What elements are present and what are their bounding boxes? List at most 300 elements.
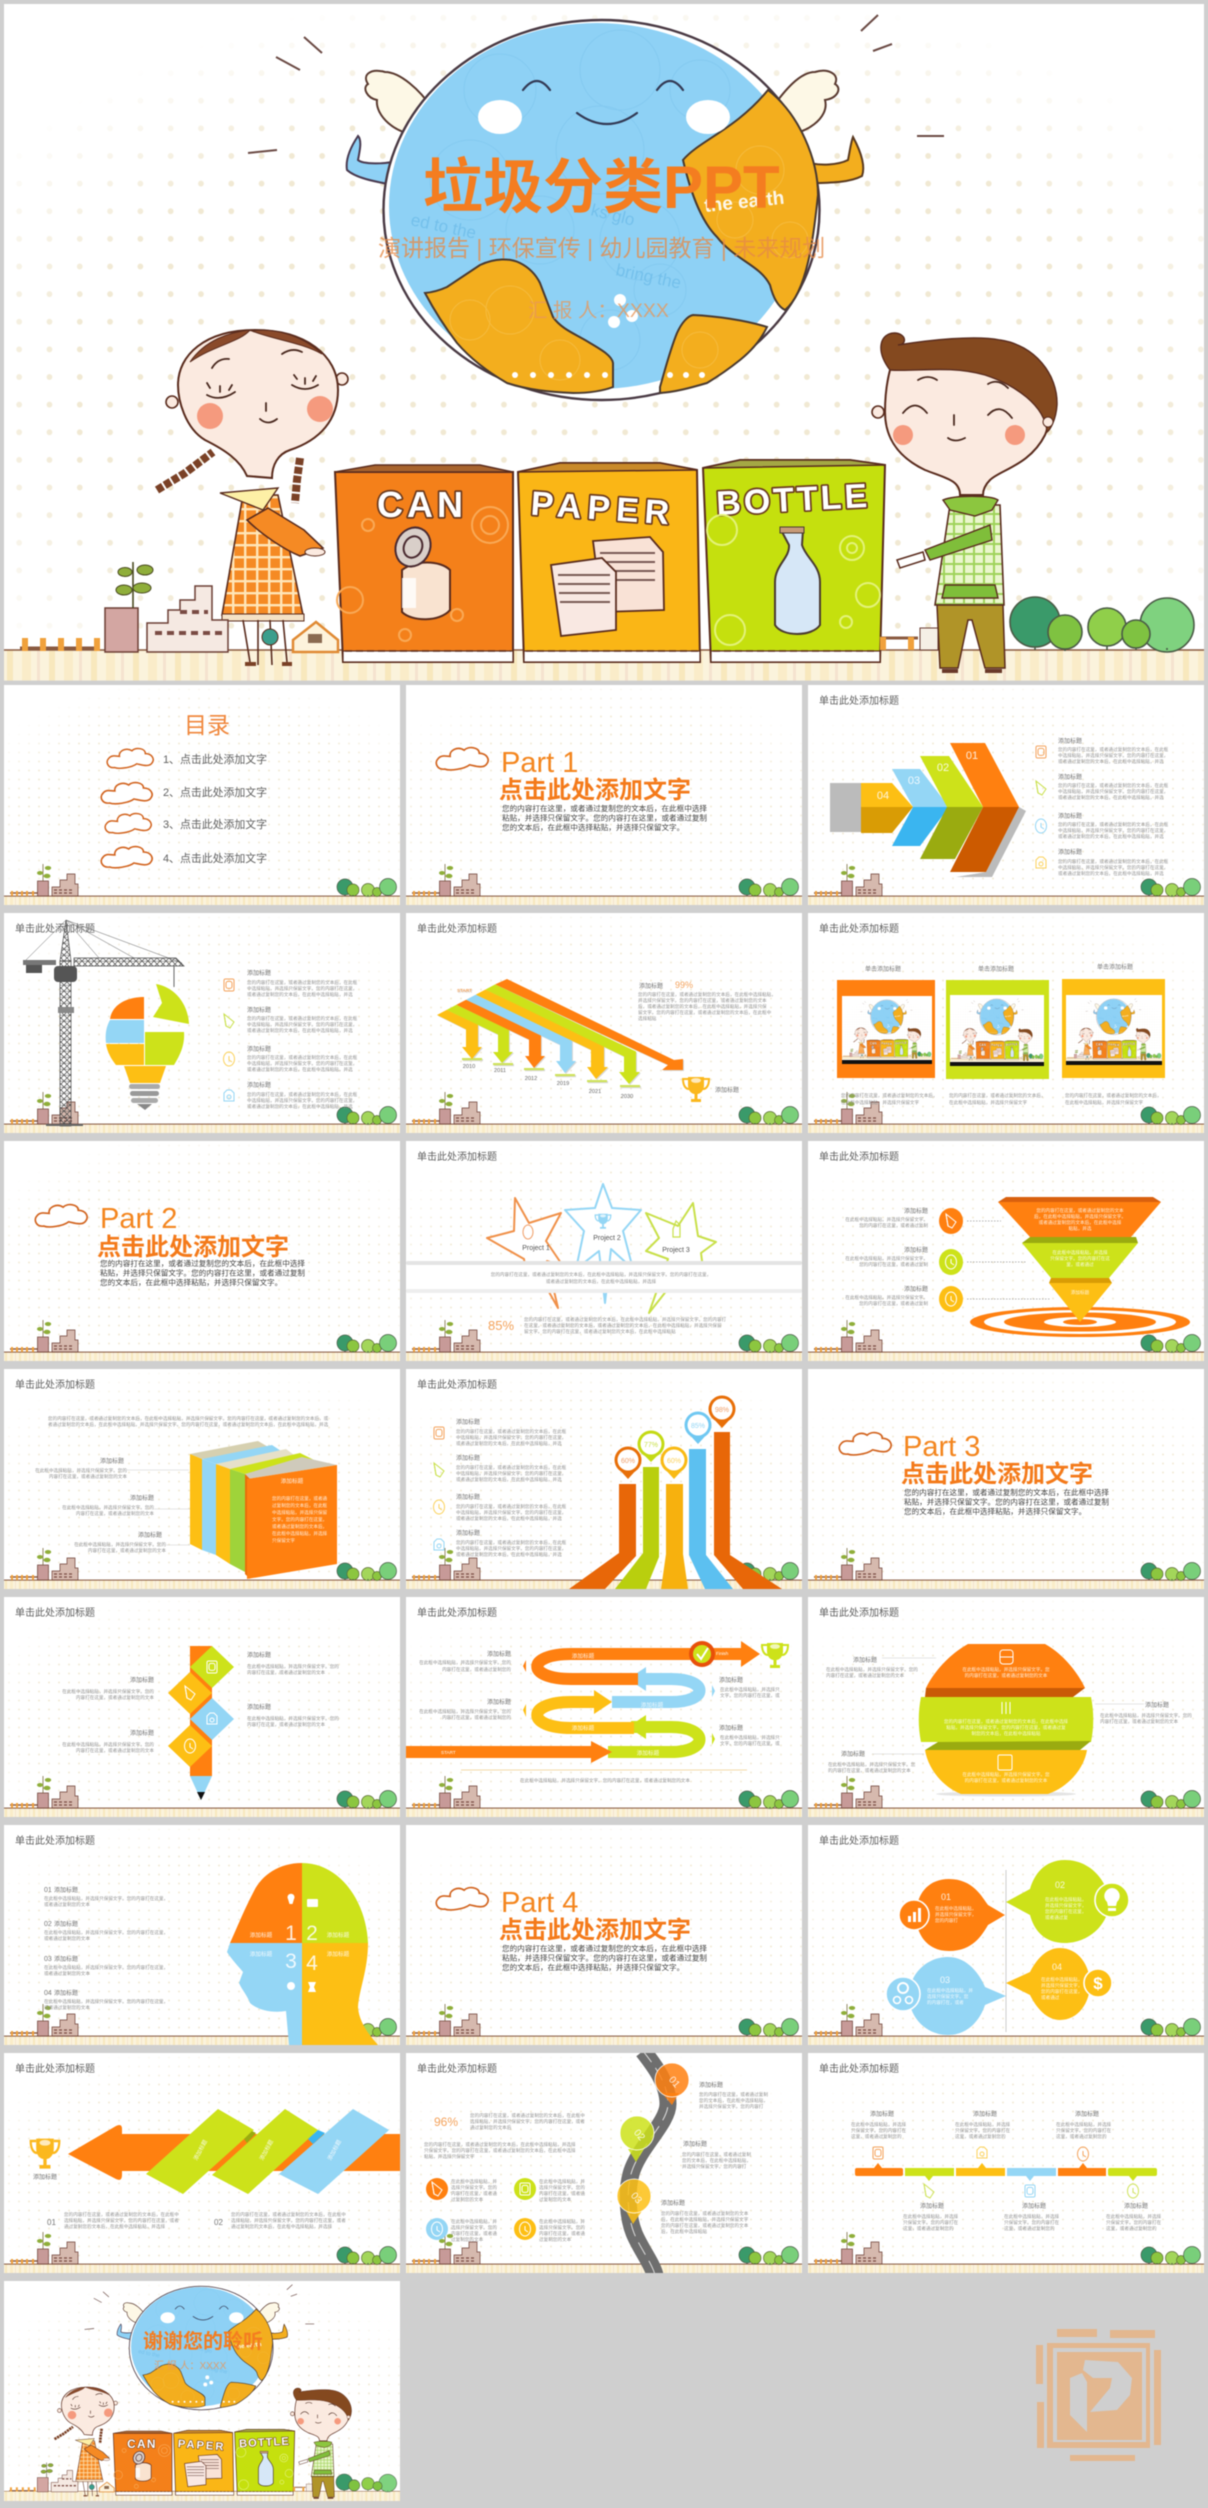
list with icons: 或者通过复制您的文本后，在此框中选择粘贴，并选 [456,1476,562,1483]
lower notes: 这里，或者通过复制您的 [1004,2225,1055,2232]
part 2 body [100,1258,305,1287]
percent pins: 77% [644,1442,658,1449]
slide: arrow with ribbons: 单击此处添加标题 [15,2062,95,2075]
list with icons: 您的内容打在这里，或者通过复制您的文本后，在此框 [456,1428,567,1435]
card: lime [946,980,1049,1079]
book stack: 添加标题 [281,1477,304,1485]
part 4 heading: Part 4 [501,1887,578,1919]
star labels [522,1235,690,1254]
part 3 body: 粘贴，并选择只保留文字。您的内容打在这里，或者通过复制 [904,1496,1109,1506]
pencil labels: 内容打在这里，或者通过复制您的文本 [247,1669,326,1676]
numbered list: 或者通过复制您的文本 [44,1935,90,1942]
pencil labels: 在此框中选择粘贴，并选择只保留文字。您的 [247,1663,339,1670]
star icons [523,1214,680,1239]
slide: crane and bulb: 单击此处添加标题 [15,922,95,935]
side labels: 在此框中选择粘贴，并选择只保留文字。您 [828,1761,916,1768]
timeline bar [855,2163,1157,2181]
layered chart: 制您的文本后，在此框中选择粘贴 [972,1730,1041,1737]
four icon notes: 在此框中选择粘贴，并 [539,2218,585,2225]
list with icons: 或者通过复制您的文本后，在此框中选择粘贴，并选 [1058,794,1164,801]
head silhouette: 添加标题 [250,1931,273,1939]
bubble 01: 并选择只保留文字， [935,1911,976,1918]
road notes: 并选择只保留文字。您的内容打 [699,2103,764,2110]
head silhouette: 1 [285,1922,297,1945]
bubble 01: 您的内容打 [935,1917,958,1924]
step text: 添加标题 [904,1207,928,1215]
side notes: 文字。您的内容打在这里，或 [720,1740,780,1747]
side labels [826,1656,1192,1774]
stat block: 粘贴，并选择只保留文字 [424,2153,475,2160]
trophy [683,1077,739,1102]
list with icons: 添加标题 [456,1529,480,1537]
girl [157,452,213,490]
slide: part 1 [406,685,802,905]
head silhouette: 添加标题 [250,1950,273,1958]
funnel layers: 只保留文字。您的内容打在这 [1050,1255,1110,1262]
funnel layers: 或者通过复制您的文本后，在此框中选择 [1039,1219,1122,1226]
recycling bins [335,465,513,662]
trophy: 添加标题 [33,2173,57,2181]
slide: winding road: 单击此处添加标题 [417,2062,497,2075]
four icon notes: 选择只保留文字。您的 [451,2184,497,2191]
road pins: 01 [666,2075,682,2091]
recycling bins: CAN [377,484,467,525]
slide: books: 单击此处添加标题 [15,1378,95,1391]
list with icons: 或者通过复制您的文本后，在此框中选择粘贴，并选 [247,1066,353,1073]
card labels: 单击添加标题 [865,965,901,973]
list with icons [1036,737,1169,877]
list with icons: 中选择粘贴，并选择只保留文字。您的内容打在这里， [247,1060,357,1067]
slide: winding road [406,2051,802,2275]
upper notes: 这里，或者通过复制您的 [955,2133,1006,2140]
list with icons: 或者通过复制您的文本后，在此框中选择粘贴，并选 [1058,870,1164,877]
thank you title: 谢谢您的聆听 [143,2330,263,2353]
star labels: Project 3 [662,1247,690,1254]
part 3 body: 您的文本后，在此框中选择粘贴，并选择只保留文字。 [904,1506,1086,1516]
hero subtitle: 演讲报告 | 环保宣传 | 幼儿园教育 | 未来规划 [378,235,825,261]
part 4 heading [499,1887,691,1944]
book stack: 中选择粘贴，并选择只保留 [272,1509,328,1516]
head silhouette [227,1863,378,2045]
step text: 添加标题 [904,1285,928,1293]
flow labels: 添加标题 [572,1724,595,1732]
stat block: 通过复制您的文本后 [470,2124,512,2131]
ribbons: 添加标题 [191,2138,209,2162]
stat text: 后，或者通过复制您的文本后，在此框中选择粘贴，并选择只保 [638,1003,767,1010]
hero illustration: BOTTLE [715,477,871,523]
part 2 body: 您的文本后，在此框中选择粘贴，并选择只保留文字。 [100,1277,282,1287]
list with icons: 您的内容打在这里，或者通过复制您的文本后，在此框 [456,1503,567,1510]
side notes: 在此框中选择粘贴，并选择只保留文字。您的 [419,1708,511,1715]
bubble 02: 在此框中选择粘贴， [1045,1896,1086,1903]
road notes [661,2081,768,2235]
list with icons: 或者通过复制您的文本后，在此框中选择粘贴，并选 [1058,758,1164,765]
year labels: 2019 [557,1081,569,1087]
numbered list: 或者通过复制您的文本 [44,2004,90,2011]
road notes: 后，在此框中选择粘贴 [661,2228,707,2235]
four icon notes: 在此框中选择粘贴，并 [451,2178,497,2185]
upper notes: 只保留文字。您的内容打在 [955,2127,1011,2134]
list with icons [434,1418,567,1558]
pencil [168,1646,234,1800]
intro text [48,1415,329,1428]
upper notes: 添加标题 [973,2110,997,2118]
four icon notes: 内容打在这里，或者通 [451,2230,497,2237]
card captions: 在此框中选择粘贴，并选择只保留文字 [841,1099,920,1106]
step text: 您的内容打在这里，或者通过复制 [859,1222,928,1229]
list with icons: 添加标题 [247,1045,271,1053]
percent note: 留文字。您的内容打在这里，或者通过复制您的文本后，在此框中选择粘贴 [524,1328,676,1335]
stat text: 并选择只保留文字。您的内容打在这里，或者通过复制您的文本 [638,997,767,1004]
lower notes: 添加标题 [920,2202,944,2210]
list with icons: 添加标题 [1058,737,1082,745]
slide: funnel: 单击此处添加标题 [819,1150,899,1163]
side notes: 在此框中选择粘贴，并选择只 [720,1734,780,1741]
part 2 body: 您的内容打在这里，或者通过复制您的文本后，在此框中选择 [100,1258,305,1268]
side notes: 内容打在这里，或者通过复制您的 [442,1666,511,1673]
flow labels [441,1651,729,1757]
book stack: 在此框中选择粘贴，并选择 [272,1530,328,1537]
watermark logo [1036,2329,1161,2461]
slide: thank you [4,2281,400,2501]
numbered list: 添加标题 [54,1989,78,1997]
four icon notes: 选择只保留文字。您的 [539,2224,585,2231]
slide: head diagram [4,1825,400,2045]
list with icons: 或者通过复制您的文本后，在此框中选择粘贴，并选 [456,1440,562,1447]
step text: 在此框中选择粘贴，并选择只保留文字。 [845,1294,928,1301]
percent pins: 85% [691,1423,705,1430]
slide: segmented timeline [808,2053,1204,2273]
year labels: 2021 [589,1089,601,1095]
list with icons: 中选择粘贴，并选择只保留文字。您的内容打在这里， [1058,864,1168,871]
road notes: 您的内容打在这里，或者通过复制 [699,2091,768,2098]
slide: percent pillars [406,1369,802,1589]
list with icons: 添加标题 [247,1006,271,1014]
lower notes: 这里，或者通过复制您的 [1106,2225,1157,2232]
head silhouette: 添加标题 [327,1931,350,1939]
four icon notes: 过复制您的文本 [539,2196,572,2203]
side notes: 在此框中选择粘贴，并选择只 [720,1686,780,1693]
list with icons: 您的内容打在这里，或者通过复制您的文本后，在此框 [1058,782,1169,789]
trophy [31,2139,59,2181]
numbered list: 在此框中选择粘贴，并选择只保留文字。您的内容打在这里， [44,1895,168,1902]
side labels: 在此框中选择粘贴，并选择只保留文字。您的 [1100,1712,1192,1719]
list with icons: 您的内容打在这里，或者通过复制您的文本后，在此框 [247,1091,358,1098]
intro text: 您的内容打在这里，或者通过复制您的文本后，在此框中选择粘贴，并选择只保留文字。您的内容打在这里，或者通过复制您的文本后，或 [48,1415,329,1422]
book labels: 内容打在这里，或者通过复制您的文本 [49,1473,127,1480]
part 1 heading [499,747,691,804]
stat text: 您的内容打在这里，或者通过复制您的文本后，在此框中选择粘贴， [638,991,776,998]
side notes: 添加标题 [487,1650,511,1658]
lower notes: 只保留文字。您的内容打在 [903,2219,959,2226]
bubble 04: 并选择只保留文字， [1041,1982,1082,1989]
slide: segmented timeline: 单击此处添加标题 [819,2062,899,2075]
slide: three picture cards [808,913,1204,1133]
part 1 body: 粘贴，并选择只保留文字。您的内容打在这里，或者通过复制 [502,812,707,822]
stat block: 只保留文字。您的内容打在这里，或者通过复制您的文本后，在此框中选择 [424,2147,576,2154]
slide: part 2 [4,1141,400,1361]
list with icons: 或者通过复制您的文本后，在此框中选择粘贴，并选 [456,1551,562,1558]
hero illustration: bring the [614,260,683,293]
slide: funnel [808,1141,1204,1361]
ribbons: 添加标题 [325,2138,343,2162]
side notes [419,1650,780,1747]
list with icons: 您的内容打在这里，或者通过复制您的文本后，在此框 [247,1015,358,1022]
four icon notes: 内容打在这里，或者通 [451,2190,497,2197]
slide: table of contents [4,685,400,905]
year labels: 2011 [494,1068,506,1074]
snake flow [406,1641,760,1763]
book labels: 添加标题 [138,1531,162,1539]
part 4 heading: 点击此处添加文字 [499,1916,691,1944]
slide: books [4,1369,400,1589]
flow labels: 添加标题 [572,1652,595,1660]
pencil labels: 添加标题 [247,1651,271,1659]
list with icons: 中选择粘贴，并选择只保留文字。您的内容打在这里， [456,1545,566,1552]
ribbons: 添加标题 [257,2138,275,2162]
contents list: 1、点击此处添加文字 [163,752,267,766]
book stack: 过复制您的文本后，在此框 [272,1502,328,1509]
bubble 02: 02 [1055,1880,1065,1890]
funnel layers: 添加标题 [1071,1289,1090,1296]
list with icons: 您的内容打在这里，或者通过复制您的文本后，在此框 [1058,858,1169,865]
list with icons: 或者通过复制您的文本后，在此框中选择粘贴，并选 [456,1515,562,1522]
part 4 body [502,1943,707,1972]
card: yellow [1062,979,1165,1078]
side notes: 文字。您的内容打在这里，或 [720,1692,780,1699]
white band: 或者通过复制您的文本后，在此框中选择粘贴，并选择 [546,1278,657,1285]
side labels: 内容打在这里，或者通过复制您的文本 [826,1672,905,1679]
flow labels: Finish [716,1651,729,1656]
bubble 01: 01 [941,1892,951,1902]
part 2 heading: 点击此处添加文字 [97,1233,289,1261]
part 2 heading [97,1203,289,1261]
list with icons: 您的内容打在这里，或者通过复制您的文本后，在此框 [247,979,358,986]
bubble 02 [1006,1860,1129,1943]
numbered list: 03 [44,1956,52,1963]
hero illustration: PAPER [530,485,677,533]
pencil labels: 内容打在这里，或者通过复制您的文本 [247,1721,326,1728]
numbered list: 在此框中选择粘贴，并选择只保留文字。您的内容打在这里， [44,1964,168,1971]
side labels: 在此框中选择粘贴，并选择只保留文字。您的 [826,1666,918,1673]
numbered list: 01 [44,1887,52,1894]
slide: pencil diamonds: 单击此处添加标题 [15,1606,95,1619]
road pins: 02 [631,2128,647,2144]
bubble 02: 您的内容打在这里， [1045,1908,1086,1915]
part 3 heading [901,1431,1093,1488]
four icon notes: 内容打在这里，或者通 [539,2190,585,2197]
road notes: 后，在此框中选择粘贴，并选择只保留文字 [661,2216,749,2223]
bubble 04: 04 [1052,1962,1062,1972]
book labels: 在此框中选择粘贴，并选择只保留文字。您的 [62,1504,154,1511]
pencil labels: 添加标题 [130,1729,154,1737]
stat text [638,980,776,1022]
list with icons: 添加标题 [1058,848,1082,856]
part 1 body: 您的文本后，在此框中选择粘贴，并选择只保留文字。 [502,822,684,832]
part 2 body: 粘贴，并选择只保留文字。您的内容打在这里，或者通过复制 [100,1268,305,1278]
ribbon arrows: START [457,988,472,993]
upper notes: 这里，或者通过复制您的 [1056,2133,1107,2140]
target [970,1307,1190,1337]
lower notes: 这里，或者通过复制您的 [903,2225,954,2232]
card captions: 您的内容打在这里，或者通过复制您的文本后， [1065,1092,1161,1099]
card captions: 在此框中选择粘贴，并选择只保留文字 [1065,1099,1144,1106]
head silhouette: 2 [306,1922,318,1945]
road notes: 添加标题 [661,2199,685,2207]
star labels: Project 2 [593,1235,621,1242]
four icon notes [426,2178,585,2243]
card: orange [837,980,935,1078]
pencil labels: 内容打在这里，或者通过复制您的文本 [76,1747,154,1754]
stat block: 96% [434,2115,458,2129]
part 3 heading: 点击此处添加文字 [901,1460,1093,1488]
funnel layers [998,1197,1161,1322]
slide: stepped arrows [808,685,1204,905]
3d arrow chart: 03 [908,775,920,787]
bubble 01: 在此框中选择粘贴， [935,1905,976,1912]
funnel layers: 您的内容打在这里，或者通过复制您的文本 [1036,1207,1124,1214]
percent pins: 98% [715,1407,729,1414]
list with icons: 您的内容打在这里，或者通过复制您的文本后，在此框 [1058,821,1169,828]
road notes: 并选择只保留文字。您的内容打 [682,2163,747,2170]
upper notes: 这里，或者通过复制您的 [851,2133,902,2140]
flow labels: 添加标题 [637,1749,660,1757]
list with icons: 中选择粘贴，并选择只保留文字。您的内容打在这里， [247,1097,357,1104]
four icon notes: 过复制您的文本 [451,2196,484,2203]
bubble 02: 或者通过复 [1045,1914,1068,1921]
book labels: 在此框中选择粘贴，并选择只保留文字。您的 [74,1541,166,1548]
side notes: 添加标题 [719,1676,743,1684]
ribbon arrows [437,979,683,1087]
numbered list: 或者通过复制您的文本 [44,1970,90,1977]
heading: contents: 目录 [184,712,230,738]
step text: 在此框中选择粘贴，并选择只保留文字。 [845,1216,928,1223]
notes: 通过复制您的文本后，在此框中选择粘贴，并选择 [64,2223,165,2230]
percent note: 您的内容打在这里，或者通过复制您的文本后，在此框中选择粘贴，并选择只保留文字。您的内容打 [524,1316,727,1323]
upper notes: 添加标题 [870,2110,894,2118]
slide: stepped arrows: 单击此处添加标题 [819,694,899,707]
trees [1010,597,1194,652]
lower notes: 在此框中选择粘贴，并选择 [1004,2213,1060,2220]
list with icons: 添加标题 [1058,773,1082,781]
list with icons: 添加标题 [1058,812,1082,820]
percent note [488,1316,727,1335]
stat text: 添加标题 [639,982,663,990]
upper notes: 在此框中选择粘贴，并选择 [1056,2121,1112,2128]
upper notes: 只保留文字。您的内容打在 [1056,2127,1112,2134]
road notes: 您的内容打在这里，或者通过复制 [682,2151,751,2158]
list with icons: 中选择粘贴，并选择只保留文字。您的内容打在这里， [456,1434,566,1441]
slide: snake arrows [406,1597,802,1817]
list with icons: 您的内容打在这里，或者通过复制您的文本后，在此框 [247,1054,358,1061]
pillars [569,1432,782,1589]
hero illustration [4,4,1204,681]
step text: 在此框中选择粘贴，并选择只保留文字。 [845,1255,928,1262]
road [628,2051,668,2275]
part 3 heading: Part 3 [903,1431,980,1463]
notes: 选择粘贴，并选择只保留文字。您的内容打在这里，或者 [64,2217,179,2224]
percent pins: 60% [621,1458,635,1465]
hero illustration: ed to the [409,210,478,243]
side labels: 添加标题 [1145,1701,1169,1709]
hero illustration: the earth [703,188,785,217]
side notes: 在此框中选择粘贴，并选择只保留文字。您的 [419,1659,511,1666]
slide: three stars: 单击此处添加标题 [417,1150,497,1163]
road notes: 您的内容打在这里，或者通过复制您的文本 [661,2222,749,2229]
percent pins: 60% [667,1458,681,1465]
slide: speech bubbles [808,1825,1204,2045]
stat block: 您的内容打在这里，或者通过复制您的文本后，在此框中 [470,2112,585,2119]
list with icons: 或者通过复制您的文本后，在此框中选择粘贴，并选 [247,1027,353,1034]
slide: part 4 [406,1825,802,2045]
numbered list [44,1886,168,2011]
intro text: 者通过复制您的文本后，在此框中选择粘贴，并选择只保留文字。您的内容打在这里，或者通过复制您的文本后，在此框中选择粘贴，并选 [48,1421,329,1428]
four icon notes: 过复制您的文本 [451,2236,484,2243]
list with icons: 或者通过复制您的文本后，在此框中选择粘贴，并选 [247,1103,353,1110]
step text: 您的内容打在这里，或者通过复制 [859,1300,928,1307]
book stack: 只保留文字 [272,1537,295,1544]
slide: speech bubbles: 单击此处添加标题 [819,1834,899,1847]
side labels: 内容打在这里，或者通过复制您的文本 [1100,1718,1179,1725]
ribbons [146,2109,389,2194]
slide: burger layers: 单击此处添加标题 [819,1606,899,1619]
bubble 04: 在此框中选择粘贴， [1041,1976,1082,1983]
bubble 03: 03 [940,1975,950,1985]
four icon notes: 选择只保留文字。您的 [539,2184,585,2191]
numbered list: 在此框中选择粘贴，并选择只保留文字。您的内容打在这里， [44,1998,168,2005]
white band: 您的内容打在这里，或者通过复制您的文本后，在此框中选择粘贴，并选择只保留文字。您的内容打在这里， [491,1271,711,1278]
book labels: 添加标题 [130,1494,154,1502]
side notes: 添加标题 [487,1698,511,1706]
side labels: 的内容打在这里，或者通过复制您的文本 [828,1767,911,1774]
pencil labels: 添加标题 [130,1676,154,1684]
bubble 03: 的内容打在，或者 [927,1999,964,2006]
bubble 04: $ [1093,1974,1103,1993]
stat text: 留文字。您的内容打在这里，或者通过复制您的文本后，在此框中 [638,1009,772,1016]
year labels [463,1064,633,1100]
list with icons: 添加标题 [456,1454,480,1462]
part 4 body: 您的文本后，在此框中选择粘贴，并选择只保留文字。 [502,1962,684,1972]
notes [47,2211,346,2230]
3d arrow chart: 01 [966,750,978,762]
list with icons: 或者通过复制您的文本后，在此框中选择粘贴，并选 [1058,833,1164,840]
slide: percent pillars: 单击此处添加标题 [417,1378,497,1391]
slide: burger layers [808,1597,1204,1817]
part 1 body [502,803,707,832]
part 2 heading: Part 2 [100,1203,177,1235]
funnel layers: 粘贴，并选 [1069,1225,1092,1232]
funnel layers: 后，在此框中选择粘贴，并选择只保留文字。 [1034,1213,1126,1220]
head silhouette: 4 [306,1952,318,1975]
lower notes: 只保留文字。您的内容打在 [1004,2219,1060,2226]
road notes: 添加标题 [683,2140,707,2148]
side notes: 添加标题 [719,1724,743,1732]
card captions: 您的内容打在这里，或者通过复制您的文本后， [949,1092,1045,1099]
bubble 03 [886,1957,1006,2035]
numbered list: 添加标题 [54,1955,78,1963]
numbered list: 添加标题 [54,1886,78,1894]
slide: three stars [406,1141,802,1361]
list with icons: 或者通过复制您的文本后，在此框中选择粘贴，并选 [247,991,353,998]
layered chart: 您的内容打在这里，或者通过复制您的文本后，在此框中选择 [944,1718,1068,1725]
bubble 04 [1006,1948,1112,2020]
notes: 通过复制您的文本后，在此框中选择粘贴，并选择 [231,2223,332,2230]
hero slide [4,4,1204,681]
four icon notes: 在此框中选择粘贴，并 [539,2178,585,2185]
list with icons [224,969,358,1110]
four icon notes: 选择只保留文字。您的 [451,2224,497,2231]
side labels: 添加标题 [841,1750,865,1758]
